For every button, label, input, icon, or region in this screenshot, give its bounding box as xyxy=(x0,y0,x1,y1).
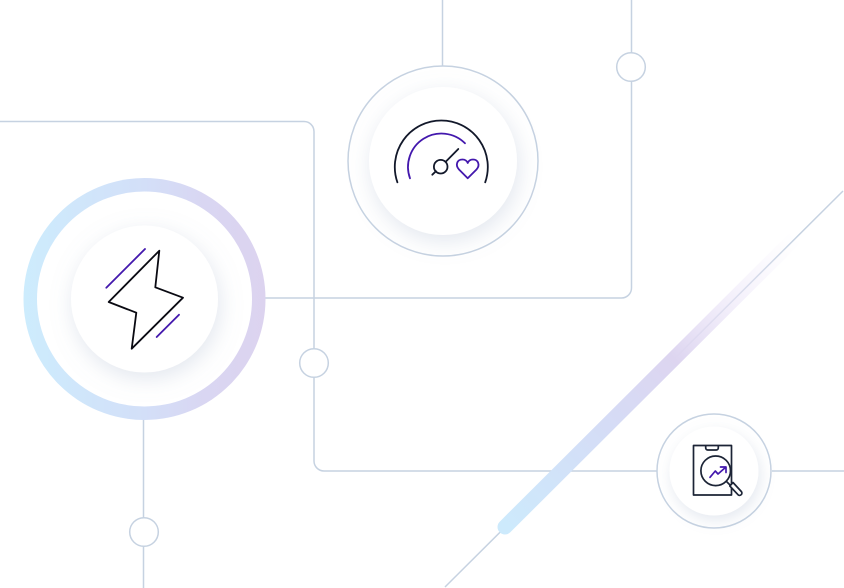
node: center xyxy=(300,349,328,377)
node: bottom left xyxy=(130,518,158,546)
panel: gauge badge xyxy=(348,66,538,256)
panel: lightning badge xyxy=(24,178,266,420)
node: top right xyxy=(617,53,645,81)
icon: lightning bolt xyxy=(106,249,183,349)
icon: clipboard with magnifier xyxy=(694,446,742,495)
gradient diagonal bar xyxy=(505,236,797,527)
icon: gauge with heart xyxy=(395,120,488,182)
panel: report badge xyxy=(657,414,771,528)
